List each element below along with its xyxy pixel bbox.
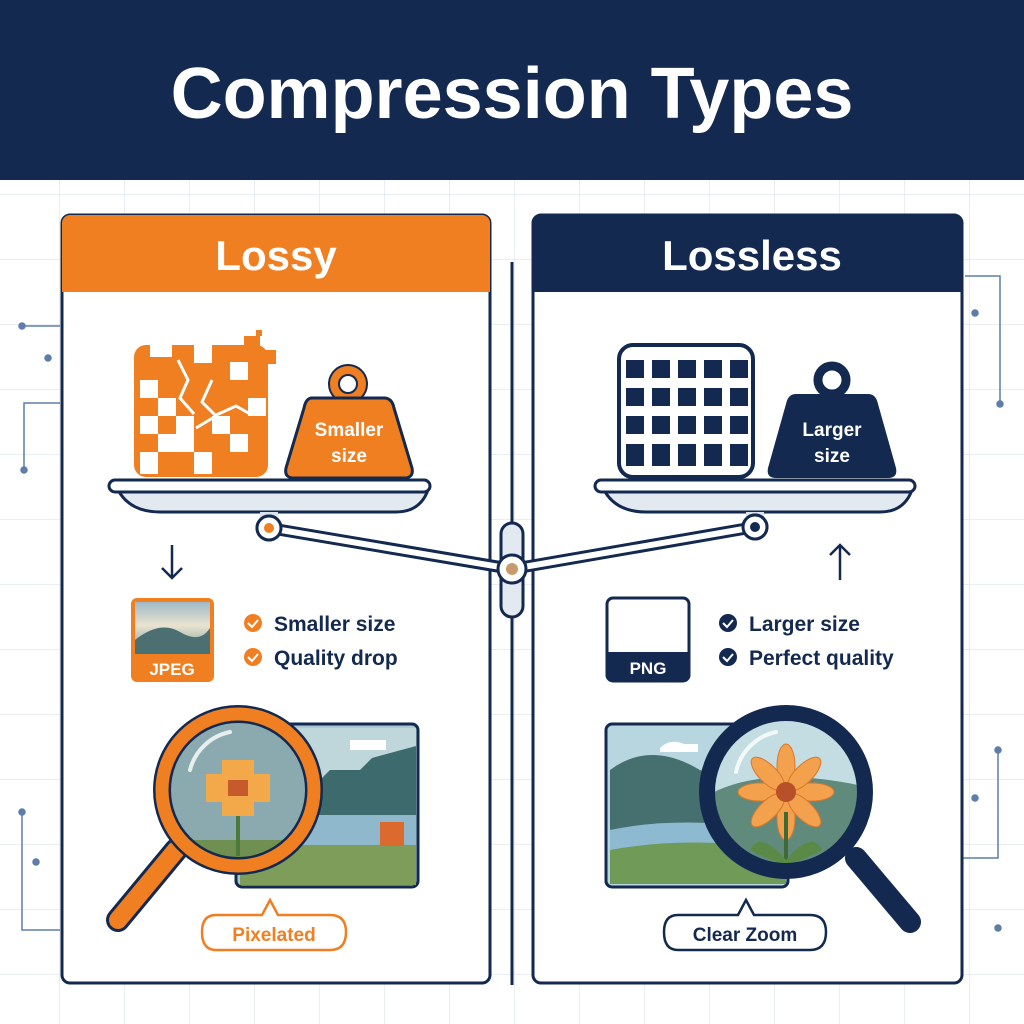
lossy header bbox=[62, 215, 490, 292]
lossless header: Lossless bbox=[662, 232, 842, 279]
central pole bbox=[510, 262, 514, 985]
icon: weight smaller size bbox=[286, 370, 412, 478]
scale pan right bbox=[595, 480, 915, 539]
icon: PNG file: PNG bbox=[630, 659, 666, 678]
icon: grid block bbox=[619, 345, 753, 477]
lossless checklist: Perfect quality bbox=[749, 647, 894, 670]
decorative circuit lines bbox=[19, 276, 1003, 931]
icon: weight larger size: size bbox=[814, 446, 850, 467]
callout: pixelated: Pixelated bbox=[232, 925, 316, 946]
lossy header: Lossy bbox=[215, 232, 337, 279]
title banner: Compression Types bbox=[171, 54, 853, 134]
callout: pixelated bbox=[202, 900, 346, 950]
scale pivot bbox=[498, 523, 526, 617]
icon: weight larger size: Larger bbox=[802, 420, 862, 441]
icon: weight smaller size: Smaller bbox=[315, 420, 384, 441]
title banner bbox=[0, 0, 1024, 180]
icon: broken pixel block bbox=[134, 330, 276, 477]
panel: lossy bbox=[62, 215, 490, 983]
lossy checklist: Quality drop bbox=[274, 647, 398, 670]
lossy checklist bbox=[244, 613, 398, 670]
clear image bbox=[606, 724, 788, 887]
scale beam bbox=[257, 515, 767, 569]
icon: JPEG file: JPEG bbox=[149, 660, 195, 679]
icon: weight smaller size: size bbox=[331, 446, 367, 467]
scale pan left bbox=[109, 480, 430, 540]
callout: clear zoom bbox=[664, 900, 826, 950]
lossy checklist: Smaller size bbox=[274, 613, 395, 636]
arrow down bbox=[162, 545, 182, 578]
icon: JPEG file bbox=[131, 598, 214, 682]
panel: lossless bbox=[533, 215, 962, 983]
icon: magnifier navy bbox=[700, 710, 910, 922]
icon: weight larger size bbox=[768, 366, 896, 478]
lossless checklist bbox=[719, 613, 894, 670]
lossless header bbox=[533, 215, 962, 292]
icon: magnifier orange bbox=[118, 710, 320, 920]
pixelated image bbox=[236, 724, 418, 887]
icon: PNG file bbox=[607, 598, 689, 681]
lossless checklist: Larger size bbox=[749, 613, 860, 636]
callout: clear zoom: Clear Zoom bbox=[693, 925, 797, 946]
arrow up bbox=[830, 545, 850, 580]
